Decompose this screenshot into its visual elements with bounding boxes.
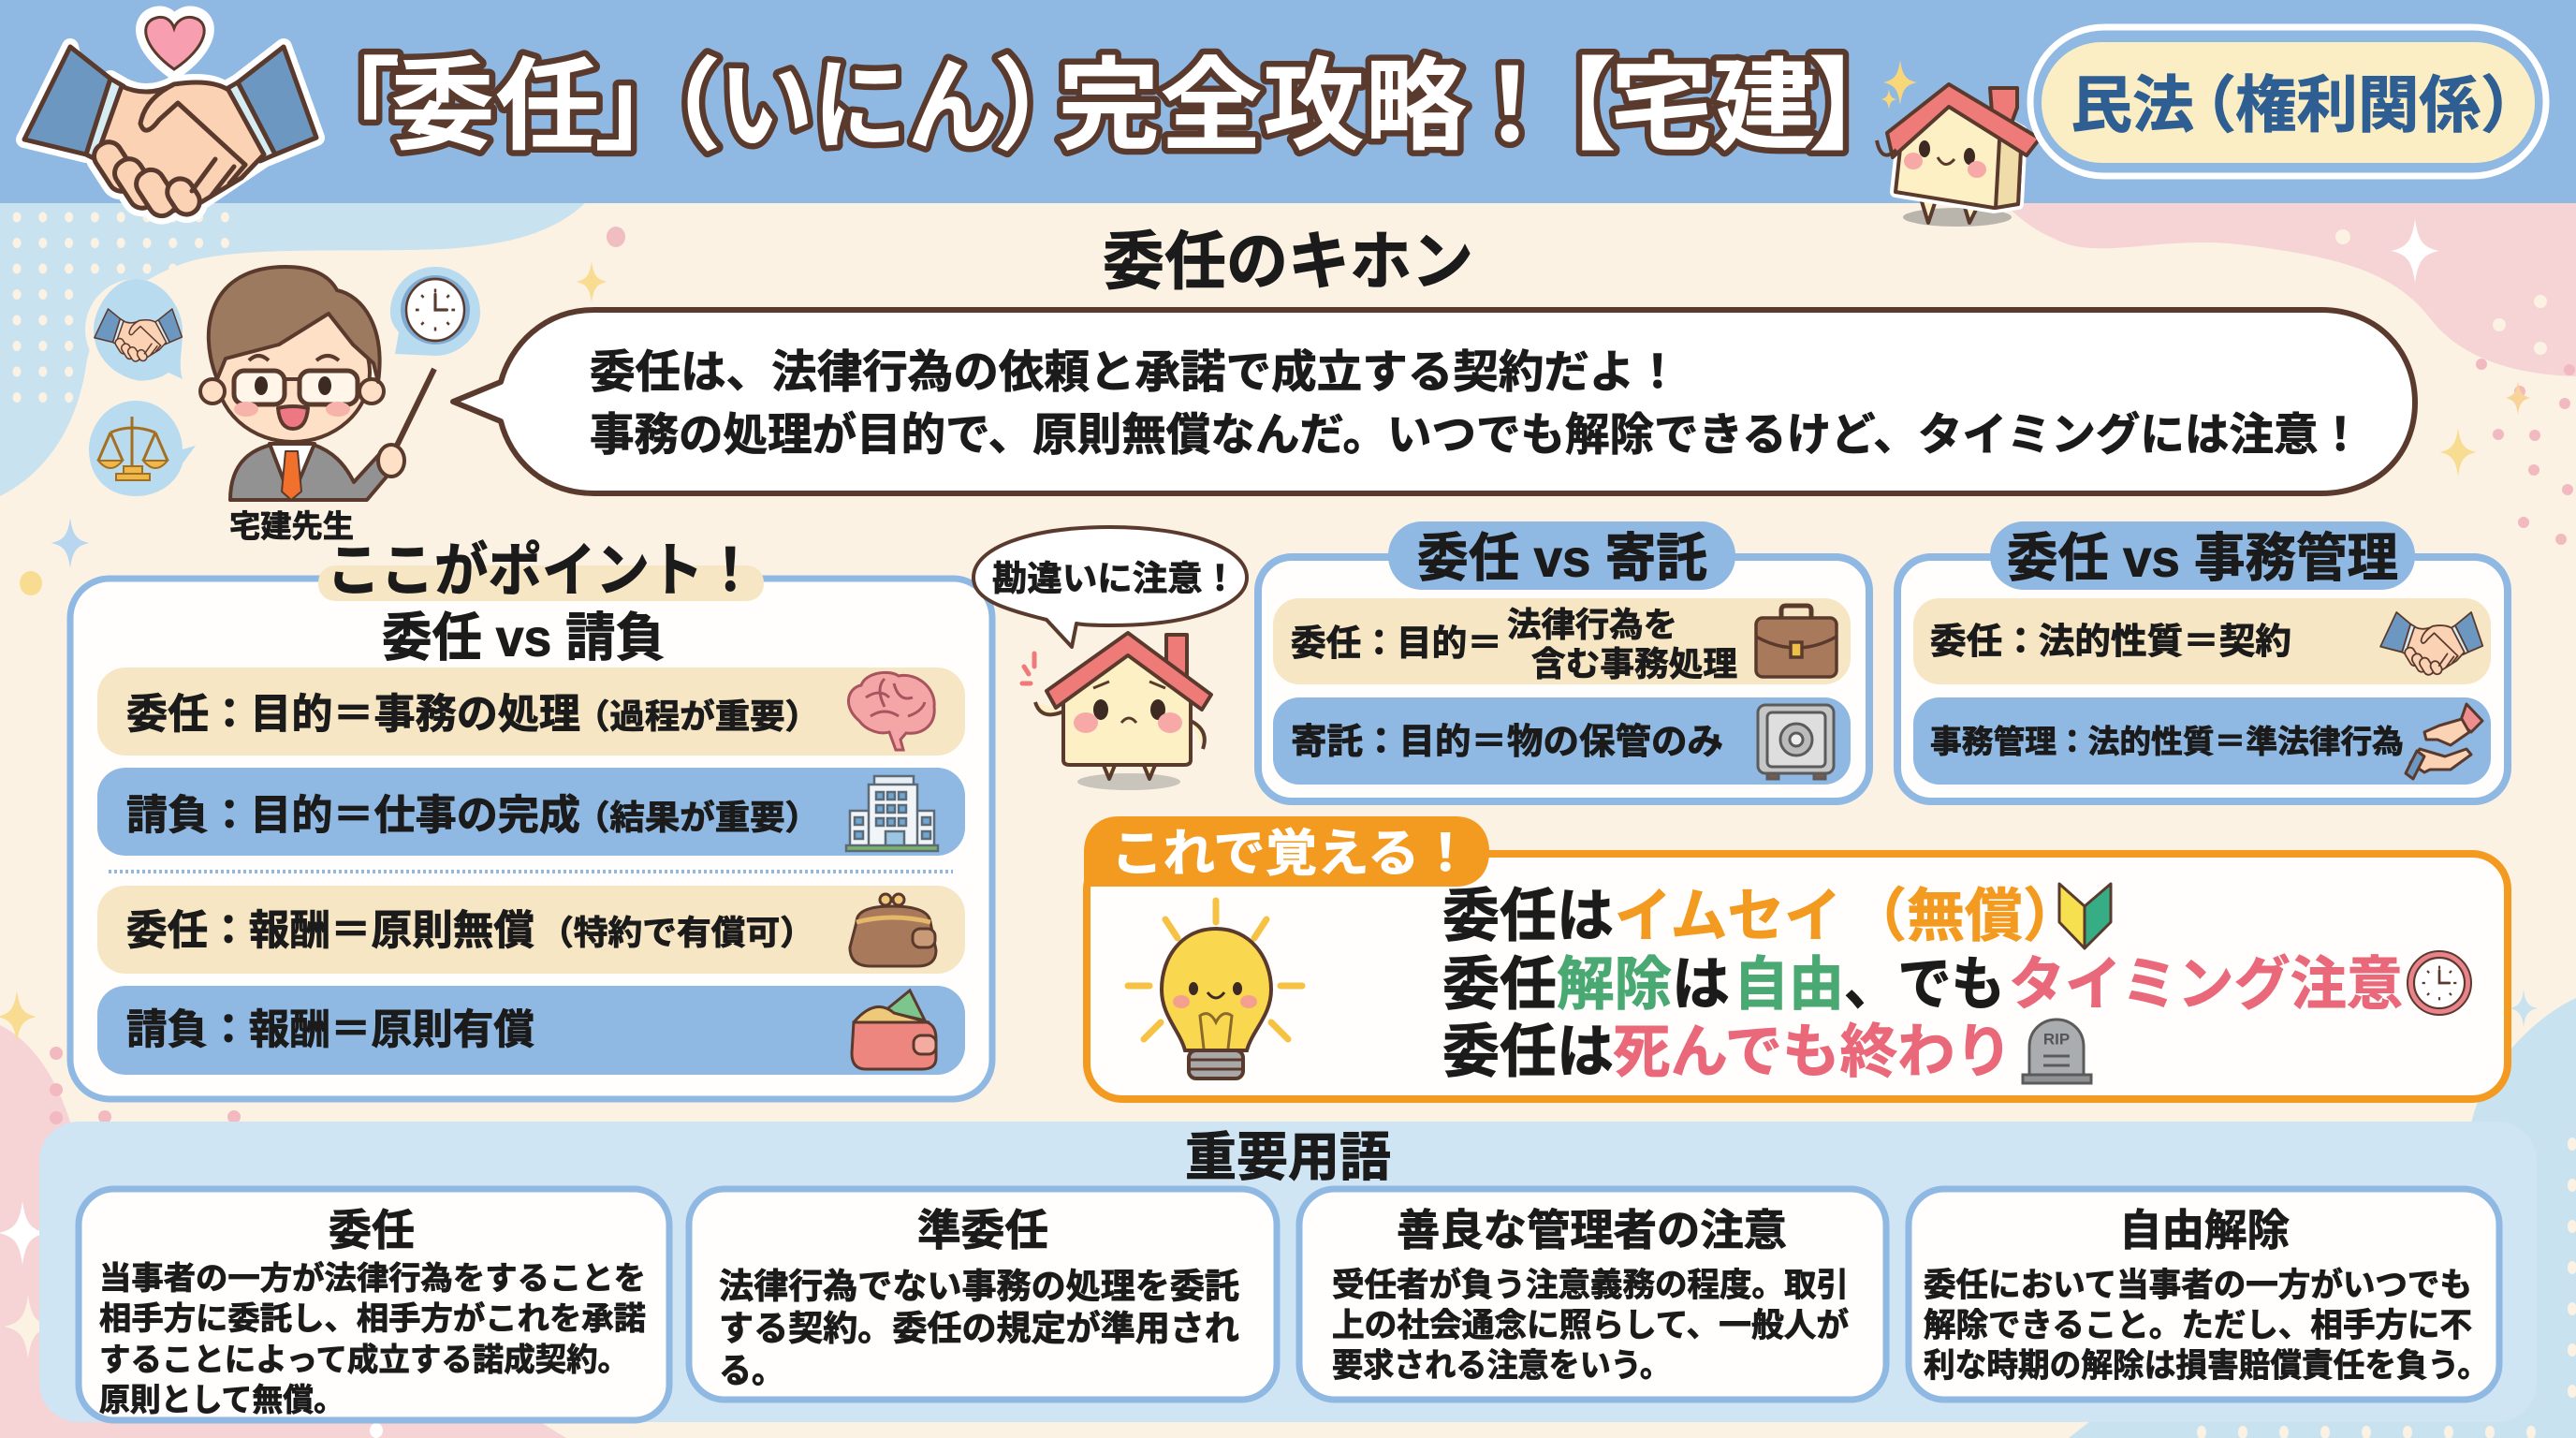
- tab: 委任 vs 寄託: 委任 vs 寄託: [1417, 528, 1707, 588]
- mnemonic line 3: 委任は: [1442, 1020, 1614, 1084]
- row: 委任 法的性質: 委任：法的性質＝契約: [1930, 623, 2291, 662]
- card: 自由解除: [1909, 1189, 2499, 1400]
- icon: giving and receiving hands: [2406, 704, 2482, 779]
- background blob: bottom-right blue: [2069, 998, 2576, 1438]
- icon: handshake: [2380, 612, 2482, 677]
- heading: 重要用語: 重要用語: [1185, 1127, 1391, 1187]
- icon: briefcase: [1756, 606, 1837, 677]
- card: 準委任: する契約。委任の規定が準用され: [719, 1309, 1239, 1348]
- icon: red wallet: [852, 990, 936, 1069]
- mnemonic line 1: [1442, 884, 2081, 949]
- card: 委任: 当事者の一方が法律行為をすることを: [99, 1260, 646, 1297]
- card: 善良な管理者の注意: 善良な管理者の注意: [1397, 1206, 1787, 1255]
- teacher: hair: [209, 267, 380, 382]
- badge: 民法（権利関係）: 民法: [2071, 70, 2194, 139]
- row: 委任 目的: 含む事務処理: [1531, 644, 1737, 683]
- panel: 委任 vs 請負: [70, 539, 992, 1099]
- character: 宅建先生 teacher: [200, 267, 434, 500]
- label: 宅建先生: 宅建先生: [229, 509, 354, 543]
- row: 委任 目的: 法律行為を: [1507, 605, 1677, 644]
- tab: これで覚える！: [1084, 816, 1489, 887]
- title: いにん: [719, 49, 1002, 163]
- card: 善良な管理者の注意: 上の社会通念に照らして、一般人が: [1332, 1307, 1849, 1344]
- row: 委任 目的: （過程が重要）: [575, 697, 820, 736]
- mnemonic line 2: タイミング注意: [2009, 953, 2403, 1017]
- icon: smiling light bulb: [1128, 901, 1302, 1078]
- card: 自由解除: 利な時期の解除は損害賠償責任を負う。: [1924, 1348, 2489, 1384]
- mnemonic line 3: 死んでも終わり: [1613, 1020, 2012, 1084]
- row: 委任 報酬: （特約で有償可）: [539, 914, 814, 951]
- card: 委任: することによって成立する諾成契約。: [99, 1343, 629, 1378]
- row: 寄託 目的: 寄託：目的＝物の保管のみ: [1291, 723, 1723, 762]
- panel heading: 委任 vs 請負: [382, 609, 666, 667]
- row: 請負 目的: [97, 768, 965, 856]
- mnemonic line 2: [1442, 953, 2403, 1017]
- card: 善良な管理者の注意: 要求される注意をいう。: [1332, 1348, 1671, 1384]
- mnemonic line 2: 解除: [1557, 953, 1672, 1017]
- title: ！: [1459, 49, 1560, 163]
- panel: 重要用語 glossary: [39, 1122, 2537, 1422]
- card: 自由解除: 自由解除: [2119, 1206, 2290, 1255]
- teacher: shirt and tie: [270, 444, 315, 500]
- title: 委任: [390, 49, 600, 163]
- tab: これで覚える！: これで覚える！: [1111, 826, 1471, 882]
- card: 準委任: る。: [719, 1352, 784, 1389]
- icon: safe: [1758, 705, 1834, 779]
- speech bubble: teacher: 事務の処理が目的で、原則無償なんだ。いつでも解除できるけど、タイミングには注意！: [590, 410, 2363, 461]
- background blob: bottom-left pink: [0, 1025, 566, 1438]
- mnemonic line 2: 、でも: [1844, 953, 2005, 1017]
- row: 事務管理 法的性質: 事務管理：法的性質＝準法律行為: [1930, 725, 2404, 760]
- row: 請負 目的: （結果が重要）: [575, 798, 820, 837]
- row: 委任 目的: 委任：目的＝: [1291, 624, 1502, 664]
- title: 宅建: [1610, 49, 1816, 163]
- background dots: top-left: [4, 204, 238, 410]
- divider dots: [109, 870, 953, 873]
- mnemonic line 1: （無償）: [1849, 884, 2081, 949]
- icon bubble: clock: [390, 267, 480, 356]
- mnemonic line 2: は: [1672, 953, 1730, 1017]
- card: 委任: 委任: [329, 1206, 415, 1255]
- card: 自由解除: 委任において当事者の一方がいつでも: [1924, 1268, 2472, 1303]
- mnemonic line 1: 委任は: [1442, 884, 1614, 949]
- icon: gravestone: RIP: [2043, 1030, 2070, 1049]
- panel: 委任 vs 事務管理: [1897, 521, 2508, 801]
- panel tab: ここがポイント！: ここがポイント！: [327, 539, 757, 603]
- callout: 勘違いに注意！: 勘違いに注意！: [992, 560, 1237, 597]
- icon: brown purse: [850, 894, 936, 966]
- callout: 勘違いに注意！: [973, 527, 1247, 647]
- heading: 委任のキホン: 委任のキホン: [1103, 227, 1473, 298]
- row: 委任 報酬: [97, 886, 965, 974]
- mnemonic line 2: 自由: [1734, 953, 1844, 1017]
- icon: sparkles near house: [1881, 60, 1917, 110]
- mascot: worried house: [1022, 633, 1211, 790]
- teacher: head: [200, 303, 384, 442]
- row: 寄託 目的: [1273, 697, 1851, 785]
- speech bubble: teacher: [453, 310, 2415, 493]
- row: 委任 報酬: 委任：報酬＝原則無償: [126, 908, 534, 953]
- card: 準委任: 法律行為でない事務の処理を委託: [719, 1268, 1239, 1305]
- background dots: right side: [2335, 229, 2575, 545]
- icon bubble: handshake: [85, 279, 186, 381]
- row: 委任 目的: [97, 668, 965, 756]
- row: 委任 目的: [1273, 598, 1851, 684]
- badge: 民法（権利関係）: 権利関係: [2235, 70, 2481, 139]
- icon: brain: [848, 672, 934, 750]
- tab: 委任 vs 事務管理: 委任 vs 事務管理: [2007, 528, 2398, 588]
- icon: gravestone: [2023, 1020, 2091, 1083]
- background dots: bottom-right: [2181, 1114, 2576, 1438]
- background blob: top-right pink: [2003, 203, 2576, 376]
- teacher: eyes and glasses: [234, 356, 404, 477]
- row: 請負 報酬: [97, 986, 965, 1075]
- title: 【: [1515, 49, 1617, 163]
- teacher: hand and pointer: [394, 369, 434, 451]
- mnemonic line 2: 委任: [1442, 953, 1557, 1017]
- mnemonic line 3: [1442, 1020, 2012, 1084]
- title: 」: [594, 49, 695, 163]
- title: （: [621, 49, 722, 163]
- badge: 民法（権利関係）: （: [2174, 70, 2236, 139]
- card: 善良な管理者の注意: [1299, 1189, 1886, 1400]
- mnemonic line 1: イムセイ: [1615, 884, 1841, 949]
- card: 準委任: [689, 1189, 1277, 1400]
- badge: 民法（権利関係）: [2030, 27, 2546, 176]
- card: 準委任: 準委任: [917, 1206, 1048, 1255]
- mascot: happy house: [1877, 84, 2040, 227]
- teacher: suit: [230, 445, 398, 500]
- badge: 民法（権利関係）: ）: [2481, 70, 2542, 139]
- background blob: top-left blue: [0, 203, 585, 496]
- title: 完全攻略: [1058, 49, 1467, 163]
- speech bubble: teacher: 委任は、法律行為の依頼と承諾で成立する契約だよ！: [590, 348, 1680, 397]
- icon: beginner mark: [2059, 884, 2111, 948]
- header band: [0, 0, 2576, 203]
- panel: これで覚える！: [1084, 816, 2508, 1099]
- icon: red clock: [2408, 951, 2471, 1015]
- card: 委任: 相手方に委託し、相手方がこれを承諾: [99, 1300, 646, 1337]
- row: 委任 法的性質: [1913, 598, 2491, 684]
- row: 委任 目的: 委任：目的＝事務の処理: [126, 691, 580, 738]
- row: 事務管理 法的性質: [1913, 697, 2491, 785]
- row: 請負 報酬: 請負：報酬＝原則有償: [126, 1007, 534, 1052]
- title: [300, 49, 1910, 163]
- title: 】: [1808, 49, 1910, 163]
- card: 善良な管理者の注意: 受任者が負う注意義務の程度。取引: [1332, 1268, 1849, 1303]
- card: 委任: [79, 1189, 669, 1420]
- icon: office building: [846, 776, 938, 851]
- card: 委任: 原則として無償。: [99, 1383, 344, 1418]
- title: 「: [300, 49, 401, 163]
- row: 請負 目的: 請負：目的＝仕事の完成: [126, 792, 580, 839]
- icon: handshake with heart: [24, 14, 316, 221]
- icon bubble: scales: [89, 401, 196, 496]
- card: 自由解除: 解除できること。ただし、相手方に不: [1924, 1307, 2472, 1344]
- title: ）: [993, 49, 1094, 163]
- panel: 委任 vs 寄託: [1258, 521, 1869, 801]
